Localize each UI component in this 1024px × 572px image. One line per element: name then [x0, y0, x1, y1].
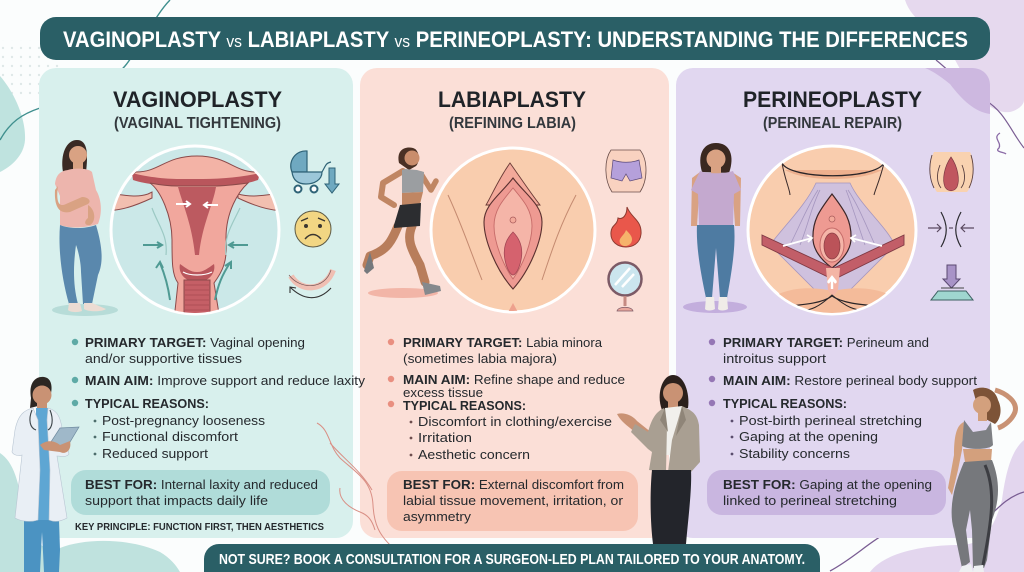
icon: curved support band — [289, 270, 333, 298]
typical reasons — [709, 396, 922, 461]
figure: doctor with tablet — [12, 377, 79, 572]
typical reasons: Stability concerns — [739, 446, 850, 461]
typical reasons — [388, 398, 612, 462]
heading: vaginoplasty: (VAGINAL TIGHTENING) — [114, 115, 281, 132]
icon: downward pressure on support base — [931, 265, 973, 300]
best for callout: BEST FOR: Gaping at the opening — [723, 477, 932, 492]
typical reasons: Irritation — [418, 430, 472, 445]
icon: baby pram with down arrow — [291, 151, 339, 193]
icon: hand mirror — [608, 262, 642, 311]
primary target — [72, 335, 305, 366]
primary target: and/or supportive tissues — [85, 351, 242, 366]
heading: labiaplasty — [438, 87, 586, 132]
primary target: introitus support — [723, 351, 826, 366]
call to action banner: NOT SURE? BOOK A CONSULTATION FOR A SURGEON-LED PLAN TAILORED TO YOUR ANATOMY. — [219, 551, 805, 568]
primary target — [388, 335, 603, 366]
circle diagram: labia minora anatomy — [431, 148, 595, 316]
main aim — [388, 372, 625, 400]
figure: woman in lavender t-shirt — [683, 143, 747, 313]
typical reasons: TYPICAL REASONS: — [85, 396, 209, 411]
panel: vaginoplasty background — [39, 68, 353, 538]
key principle: KEY PRINCIPLE: FUNCTION FIRST, THEN AESTHETICS — [75, 521, 324, 533]
primary target: PRIMARY TARGET: Perineum and — [723, 335, 929, 350]
panel text: perineoplasty — [707, 335, 977, 515]
best for callout: BEST FOR: External discomfort from — [403, 477, 624, 492]
typical reasons: Reduced support — [102, 446, 208, 461]
decorative peach curves — [317, 423, 390, 545]
best for callout — [387, 471, 638, 531]
typical reasons: Functional discomfort — [102, 429, 238, 444]
typical reasons: Post-pregnancy looseness — [102, 413, 265, 428]
best for callout: linked to perineal stretching — [723, 493, 897, 508]
best for callout: support that impacts daily life — [85, 493, 268, 508]
figure: woman in grey activewear — [948, 388, 1015, 572]
primary target — [709, 335, 929, 366]
circle diagram: uterus and supportive tissues — [110, 144, 280, 316]
typical reasons: TYPICAL REASONS: — [403, 398, 526, 413]
heading: labiaplasty: (REFINING LABIA) — [449, 115, 576, 132]
icon: perineal area — [930, 152, 974, 192]
panel text: vaginoplasty — [71, 335, 365, 533]
heading: labiaplasty: LABIAPLASTY — [438, 87, 586, 112]
panel: labiaplasty background — [360, 68, 669, 538]
typical reasons: Gaping at the opening — [739, 429, 878, 444]
panel text: labiaplasty — [387, 335, 638, 531]
typical reasons: Discomfort in clothing/exercise — [418, 414, 612, 429]
typical reasons: Post-birth perineal stretching — [739, 413, 922, 428]
figure: runner — [364, 148, 441, 298]
typical reasons: TYPICAL REASONS: — [723, 396, 847, 411]
heading: perineoplasty: (PERINEAL REPAIR) — [763, 115, 902, 132]
heading: vaginoplasty: VAGINOPLASTY — [113, 87, 282, 112]
circle diagram: perineal body and support muscles — [748, 146, 916, 320]
icon: sad face — [295, 211, 331, 247]
typical reasons: Aesthetic concern — [418, 447, 530, 462]
main aim: MAIN AIM: Restore perineal body support — [723, 373, 977, 388]
primary target: (sometimes labia majora) — [403, 351, 557, 366]
icon: compression arrows — [928, 212, 974, 247]
title bar: VAGINOPLASTY vs LABIAPLASTY vs PERINEOPLASTY: UNDERSTANDING THE DIFFERENCES — [63, 27, 968, 52]
primary target: PRIMARY TARGET: Vaginal opening — [85, 335, 305, 350]
best for callout: labial tissue movement, irritation, or — [403, 493, 624, 508]
typical reasons — [72, 396, 265, 461]
best for callout — [71, 470, 330, 515]
best for callout: BEST FOR: Internal laxity and reduced — [85, 477, 318, 492]
best for callout — [707, 470, 946, 515]
heading: perineoplasty — [743, 87, 922, 132]
title bar — [40, 17, 990, 60]
icon: shorts — [606, 150, 646, 192]
figure: pregnant woman — [52, 140, 118, 316]
call to action banner — [204, 544, 820, 572]
panel: perineoplasty background — [676, 68, 990, 538]
icon: flame — [611, 207, 641, 247]
main aim: MAIN AIM: Refine shape and reduce — [403, 372, 625, 387]
figure: presenter in grey blazer — [617, 375, 700, 544]
primary target: PRIMARY TARGET: Labia minora — [403, 335, 603, 350]
main aim: excess tissue — [403, 385, 483, 400]
heading: vaginoplasty — [113, 87, 282, 132]
purple blob overlap — [925, 68, 990, 114]
main aim: MAIN AIM: Improve support and reduce laxity — [85, 373, 365, 388]
heading: perineoplasty: PERINEOPLASTY — [743, 87, 922, 112]
best for callout: asymmetry — [403, 509, 471, 524]
